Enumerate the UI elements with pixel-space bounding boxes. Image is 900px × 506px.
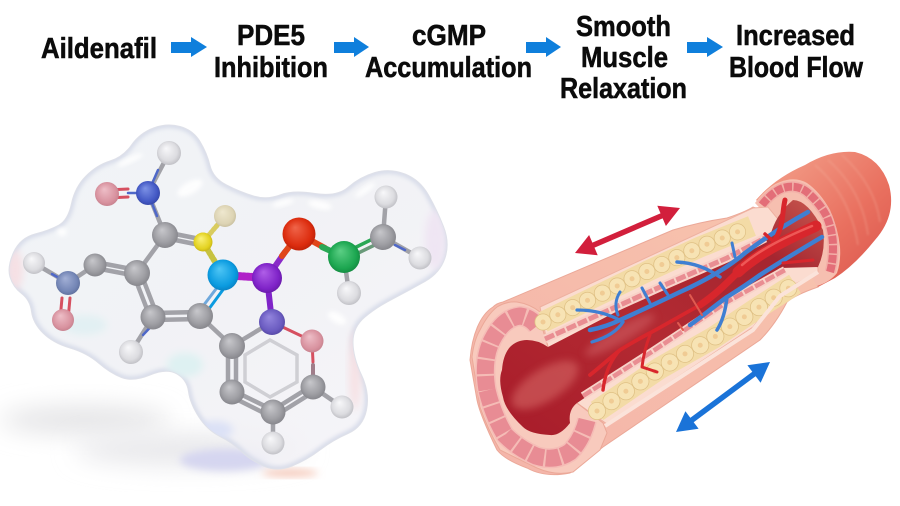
inner benzene ring outline: [245, 340, 297, 397]
translucent bubble surface: [7, 125, 447, 469]
step: Smooth Muscle Relaxation: [560, 11, 687, 105]
vessel lumen: [500, 200, 824, 435]
blue double-headed arrow: [676, 362, 770, 432]
bubble highlights: [57, 151, 377, 327]
atoms: [23, 141, 432, 454]
step: Smooth Muscle Relaxation: Relaxation: [560, 73, 687, 105]
flow chart header: [41, 11, 863, 105]
arrow 4: [687, 37, 723, 57]
upper muscle band: [545, 238, 765, 339]
molecule illustration: [0, 125, 447, 477]
cut-open interior base: [540, 207, 818, 424]
step: PDE5 Inhibition: Inhibition: [214, 52, 328, 84]
lower cut edge highlight: [605, 272, 818, 426]
red arteries: [590, 200, 816, 390]
vessel far-end cap: [756, 152, 891, 287]
step: PDE5 Inhibition: [214, 20, 328, 84]
step: cGMP Accumulation: [365, 20, 532, 84]
step: Increased Blood Flow: Blood Flow: [729, 52, 863, 84]
step: Aildenafil: Aildenafil: [41, 33, 157, 65]
near-end cross-section wall: [472, 302, 607, 473]
step: PDE5 Inhibition: PDE5: [237, 20, 305, 52]
arrow 3: [526, 37, 561, 57]
step: Increased Blood Flow: Increased: [736, 20, 855, 52]
molecule drop shadow: [0, 406, 318, 477]
arrow 2: [334, 37, 369, 57]
step: cGMP Accumulation: cGMP: [412, 20, 486, 52]
step: Increased Blood Flow: [729, 20, 863, 84]
far-end ring cross-section: [755, 179, 840, 286]
blue veins: [577, 212, 822, 342]
blood vessel illustration: [470, 152, 891, 475]
upper fat-cell layer: [543, 226, 752, 322]
step: Smooth Muscle Relaxation: Smooth: [576, 11, 671, 43]
red double-headed arrow: [575, 206, 680, 255]
step: cGMP Accumulation: Accumulation: [365, 52, 532, 84]
lower fat-cell layer: [597, 284, 795, 411]
arrow 1: [171, 37, 207, 57]
step: Smooth Muscle Relaxation: Muscle: [581, 42, 668, 74]
bonds: [34, 153, 420, 443]
vessel outer wall: [470, 207, 818, 475]
lower muscle band: [583, 270, 785, 396]
